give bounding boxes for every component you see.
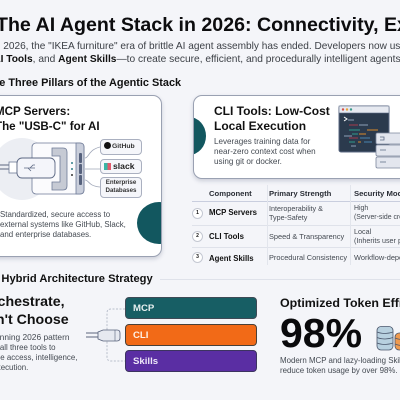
- bar: Skills: [125, 350, 257, 372]
- badge: enterprise databases: Databases: [106, 187, 136, 194]
- row 1 strength: Interoperability &: [269, 204, 323, 213]
- row 3 strength: Procedural Consistency: [269, 253, 347, 262]
- CLI heading: [214, 104, 330, 133]
- badge: slack: slack: [113, 161, 135, 171]
- table column headers: Primary Strength: [269, 189, 331, 198]
- token efficiency description: reduce token usage by over 98%.: [280, 366, 398, 375]
- row 1 strength: [269, 204, 323, 222]
- CLI description: [214, 137, 316, 166]
- badge: enterprise databases: [100, 177, 142, 198]
- row 1 security: High: [354, 205, 368, 212]
- teal side circle: [172, 117, 206, 155]
- token efficiency description: [280, 356, 400, 375]
- row 1 strength: Type-Safety: [269, 213, 307, 222]
- row 2 security: [354, 227, 400, 245]
- row 1 security: [354, 204, 400, 221]
- MCP description: external systems like GitHub, Slack,: [0, 220, 126, 229]
- MCP description: Standardized, secure access to: [0, 210, 110, 219]
- CLI description: near-zero context cost when: [214, 147, 316, 156]
- CLI heading: Local Execution: [214, 119, 306, 133]
- bar: Skills: Skills: [133, 356, 158, 367]
- row 1 name: MCP Servers: [209, 208, 257, 217]
- badge: slack: [100, 159, 142, 174]
- panel: CLI tools: [193, 95, 400, 179]
- row 3 number: 3: [196, 254, 199, 260]
- row 1 number: 1: [196, 210, 199, 216]
- bar: CLI: CLI: [133, 330, 148, 341]
- MCP description: and enterprise databases.: [0, 230, 91, 239]
- row 2 strength: Speed & Transparency: [269, 232, 344, 241]
- row 1 number: [192, 208, 203, 219]
- teal corner circle: [137, 202, 181, 244]
- CLI description: using git or docker.: [214, 157, 282, 166]
- MCP description: [0, 210, 126, 239]
- row 2 security: Local: [354, 227, 371, 236]
- CLI heading: CLI Tools: Low-Cost: [214, 104, 330, 118]
- badge: GitHub: [100, 139, 142, 155]
- CLI description: Leverages training data for: [214, 137, 310, 146]
- table column headers: [209, 189, 400, 198]
- intro text: [0, 41, 400, 65]
- row 3 number: [192, 252, 203, 263]
- row 3 name: Agent Skills: [209, 254, 254, 263]
- row 2 number: [192, 231, 203, 242]
- bar: CLI: [125, 324, 257, 346]
- connector: plug and dotted bracket: [86, 308, 125, 362]
- orchestrate heading: [0, 294, 69, 328]
- badge: enterprise databases: Enterprise: [106, 179, 136, 186]
- big stat: 98%: 98%: [280, 310, 362, 356]
- panel: MCP servers: [0, 95, 162, 257]
- icon: token stacks: [376, 326, 400, 350]
- MCP heading: [0, 105, 100, 133]
- badge: GitHub: GitHub: [112, 143, 135, 150]
- icon: USB connector hub: [0, 138, 100, 200]
- orchestrate description: [0, 332, 77, 372]
- table column headers: Component: [209, 189, 252, 198]
- comparison table: [192, 185, 400, 265]
- bar: MCP: [125, 297, 257, 319]
- bar: MCP: MCP: [133, 303, 154, 314]
- icon: terminal window: [338, 106, 400, 168]
- row 2 name: CLI Tools: [209, 232, 244, 241]
- row 2 number: 2: [196, 233, 199, 239]
